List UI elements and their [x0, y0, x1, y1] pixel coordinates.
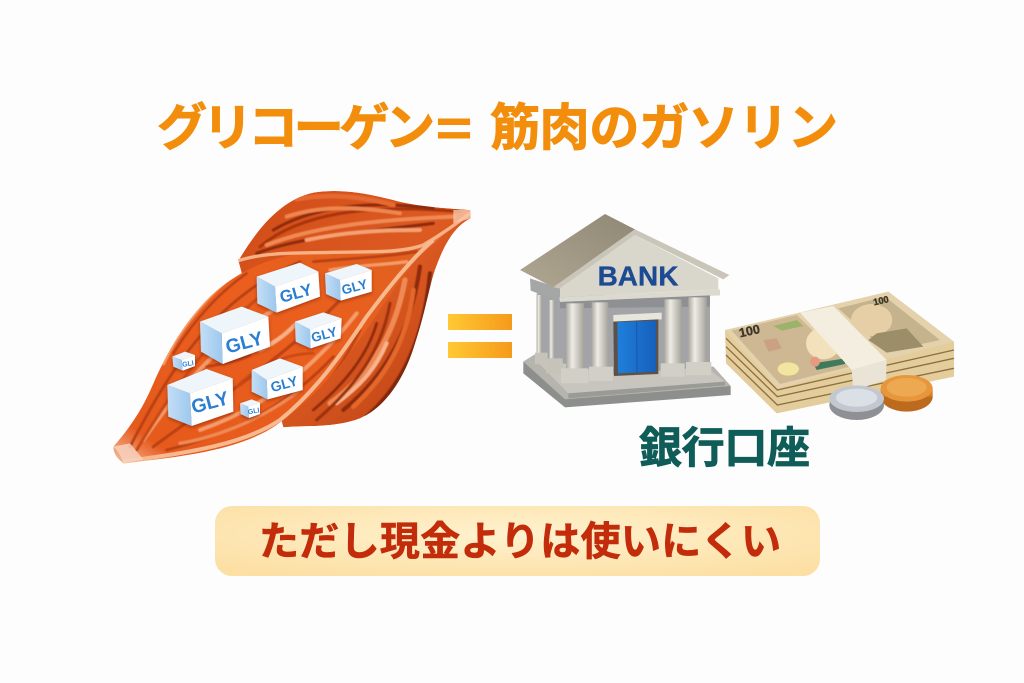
- cube: GLY 3: [200, 307, 270, 364]
- cash stack: 100: [738, 322, 761, 340]
- cube: small 2: [240, 399, 260, 418]
- callout: ただし現金よりは使いにくい: [259, 520, 781, 564]
- title: [157, 100, 838, 156]
- paper band: [800, 306, 887, 370]
- bank label: BANK: [598, 260, 678, 291]
- cube: GLY 3: GLY: [224, 328, 266, 358]
- label: bank account: 銀行口座: [639, 425, 810, 473]
- cube: small 2: GLI: [247, 407, 260, 416]
- cube: GLY 1: GLY: [278, 280, 314, 307]
- roof: [520, 214, 635, 287]
- cube: GLY 2: GLY: [340, 276, 369, 298]
- coins: [829, 375, 933, 420]
- cube: GLY 4: [295, 312, 342, 348]
- cube: small 1: [172, 352, 195, 371]
- cash stack: 100: [872, 294, 890, 307]
- cube: GLY 1: [257, 263, 320, 313]
- illustration: muscle with glycogen cubes: [113, 191, 471, 463]
- back muscle lobe: [238, 191, 471, 427]
- equals sign: [448, 314, 512, 358]
- cube: GLY 5: [167, 369, 233, 426]
- columns: [537, 295, 542, 353]
- walls: [537, 293, 710, 375]
- cube: GLY 4: GLY: [310, 324, 339, 345]
- cube: GLY 6: GLY: [269, 372, 300, 395]
- title: 筋肉のガソリン: [490, 100, 838, 156]
- cash stack: [725, 292, 954, 420]
- title: グリコーゲン: [157, 100, 435, 156]
- cube: GLY 2: [325, 264, 372, 301]
- title: =: [436, 100, 472, 156]
- steps: [523, 353, 731, 407]
- cube: GLY 5: GLY: [189, 388, 231, 418]
- callout: [215, 506, 820, 576]
- front muscle belly: [113, 213, 470, 463]
- bank: [520, 214, 731, 407]
- illustration: bank and cash: [520, 214, 954, 420]
- cube: GLY 6: [252, 358, 303, 399]
- cube: small 1: GLI: [182, 360, 194, 369]
- door: [613, 313, 662, 322]
- tendon stripes: [113, 210, 471, 463]
